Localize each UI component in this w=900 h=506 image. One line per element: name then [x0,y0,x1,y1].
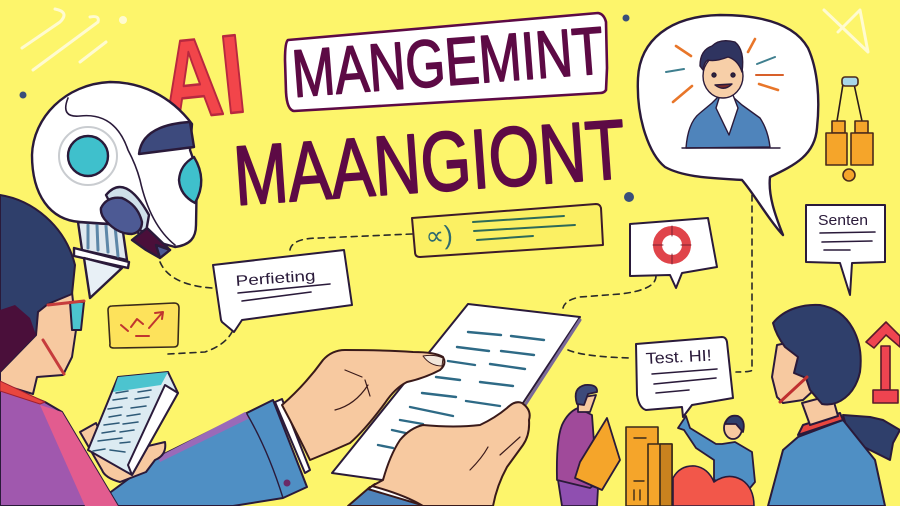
title: AI: AI [154,11,251,144]
glasses [43,301,84,374]
collar [0,381,45,404]
robot side eye [179,157,201,203]
right cuff and sleeve [348,487,427,506]
formula box: ∝) [425,220,454,251]
decorative triangle top right [824,10,868,52]
robot eye [59,127,117,185]
speech bubble: Senten [806,205,885,295]
book lines [93,390,151,452]
formula box [412,204,603,257]
robot visor [139,122,194,154]
large speech bubble with portrait [638,15,818,235]
orange boxes [626,427,672,506]
person right [768,305,900,506]
hand with book [80,372,178,482]
book cover top [113,372,168,392]
decorative sparkle lines top left [22,9,127,70]
speech bubble: target icon [630,218,717,288]
small person with folder [557,385,620,506]
left hand holding paper [282,350,444,460]
person left [0,195,118,506]
title: MAANGIONT: MAANGIONT [231,102,628,223]
paper document [332,304,580,480]
hand behind book [80,423,165,482]
portrait rays [666,39,783,102]
back hair tail [843,415,900,460]
hair [0,195,75,372]
hair [773,305,861,404]
body [768,420,885,506]
dashed connector lines [160,195,752,372]
speech bubble: Perfieting [213,250,352,332]
right hand holding paper [348,402,530,506]
robot head [32,82,201,298]
binoculars icon [826,77,873,181]
hair shadow [0,305,36,372]
speech bubble: Senten: Senten [818,212,868,229]
speech bubble: Test. HI!: Test. HI! [645,348,712,368]
body [0,384,118,506]
body highlight [40,405,118,506]
title banner: MANGEMINT: MANGEMINT [289,13,606,112]
collar [798,413,843,435]
red up arrow [866,322,900,403]
strap [780,377,807,402]
book page [88,372,178,475]
robot mouth piece [101,187,170,258]
robot seam [66,98,175,245]
portrait person [682,41,780,148]
decorative dots [20,14,634,202]
sleeve left arm [100,399,310,506]
robot neck [74,222,129,298]
paper text lines [378,332,544,448]
robot skull [32,82,197,247]
red heart [673,466,754,506]
small person waving [678,416,755,488]
folder [575,418,620,490]
neck and face [0,292,76,394]
neck [802,395,838,425]
speech bubble: Test. HI! [636,337,733,417]
speech bubble: Perfieting: Perfieting [235,267,316,290]
face [772,340,825,403]
chart card [108,303,179,348]
book spine [128,385,178,475]
